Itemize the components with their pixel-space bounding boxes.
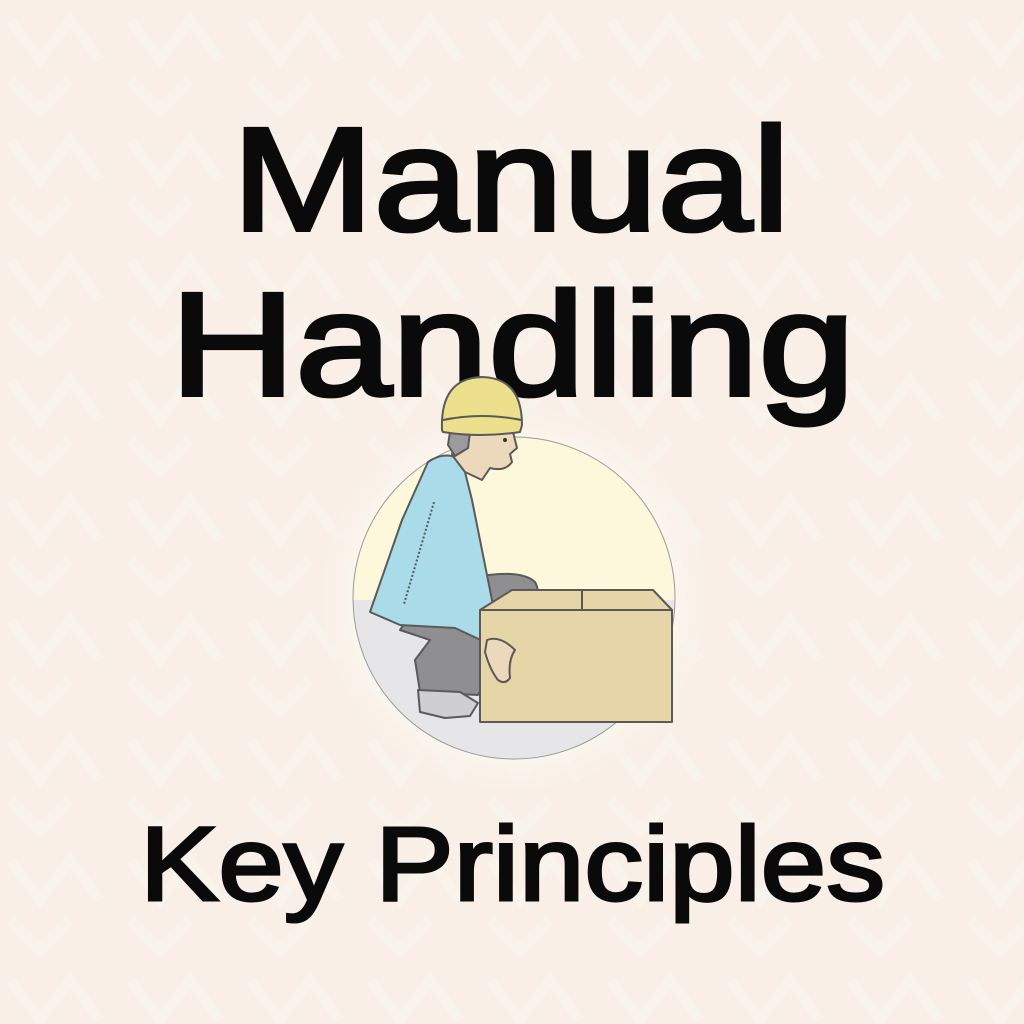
title: Manual Handling — [170, 98, 855, 427]
circle background — [354, 438, 674, 758]
shoes — [418, 690, 478, 718]
box — [480, 590, 672, 610]
jacket — [370, 455, 500, 642]
pants — [400, 574, 538, 695]
title: Manual Handling: Manual — [232, 98, 790, 262]
head — [452, 432, 517, 480]
illustration: worker lifting box — [340, 377, 690, 770]
helmet — [442, 377, 522, 435]
title: Manual Handling: Handling — [170, 263, 855, 427]
subtitle: Key Principles: Key Principles — [140, 806, 885, 923]
hand — [485, 639, 515, 682]
